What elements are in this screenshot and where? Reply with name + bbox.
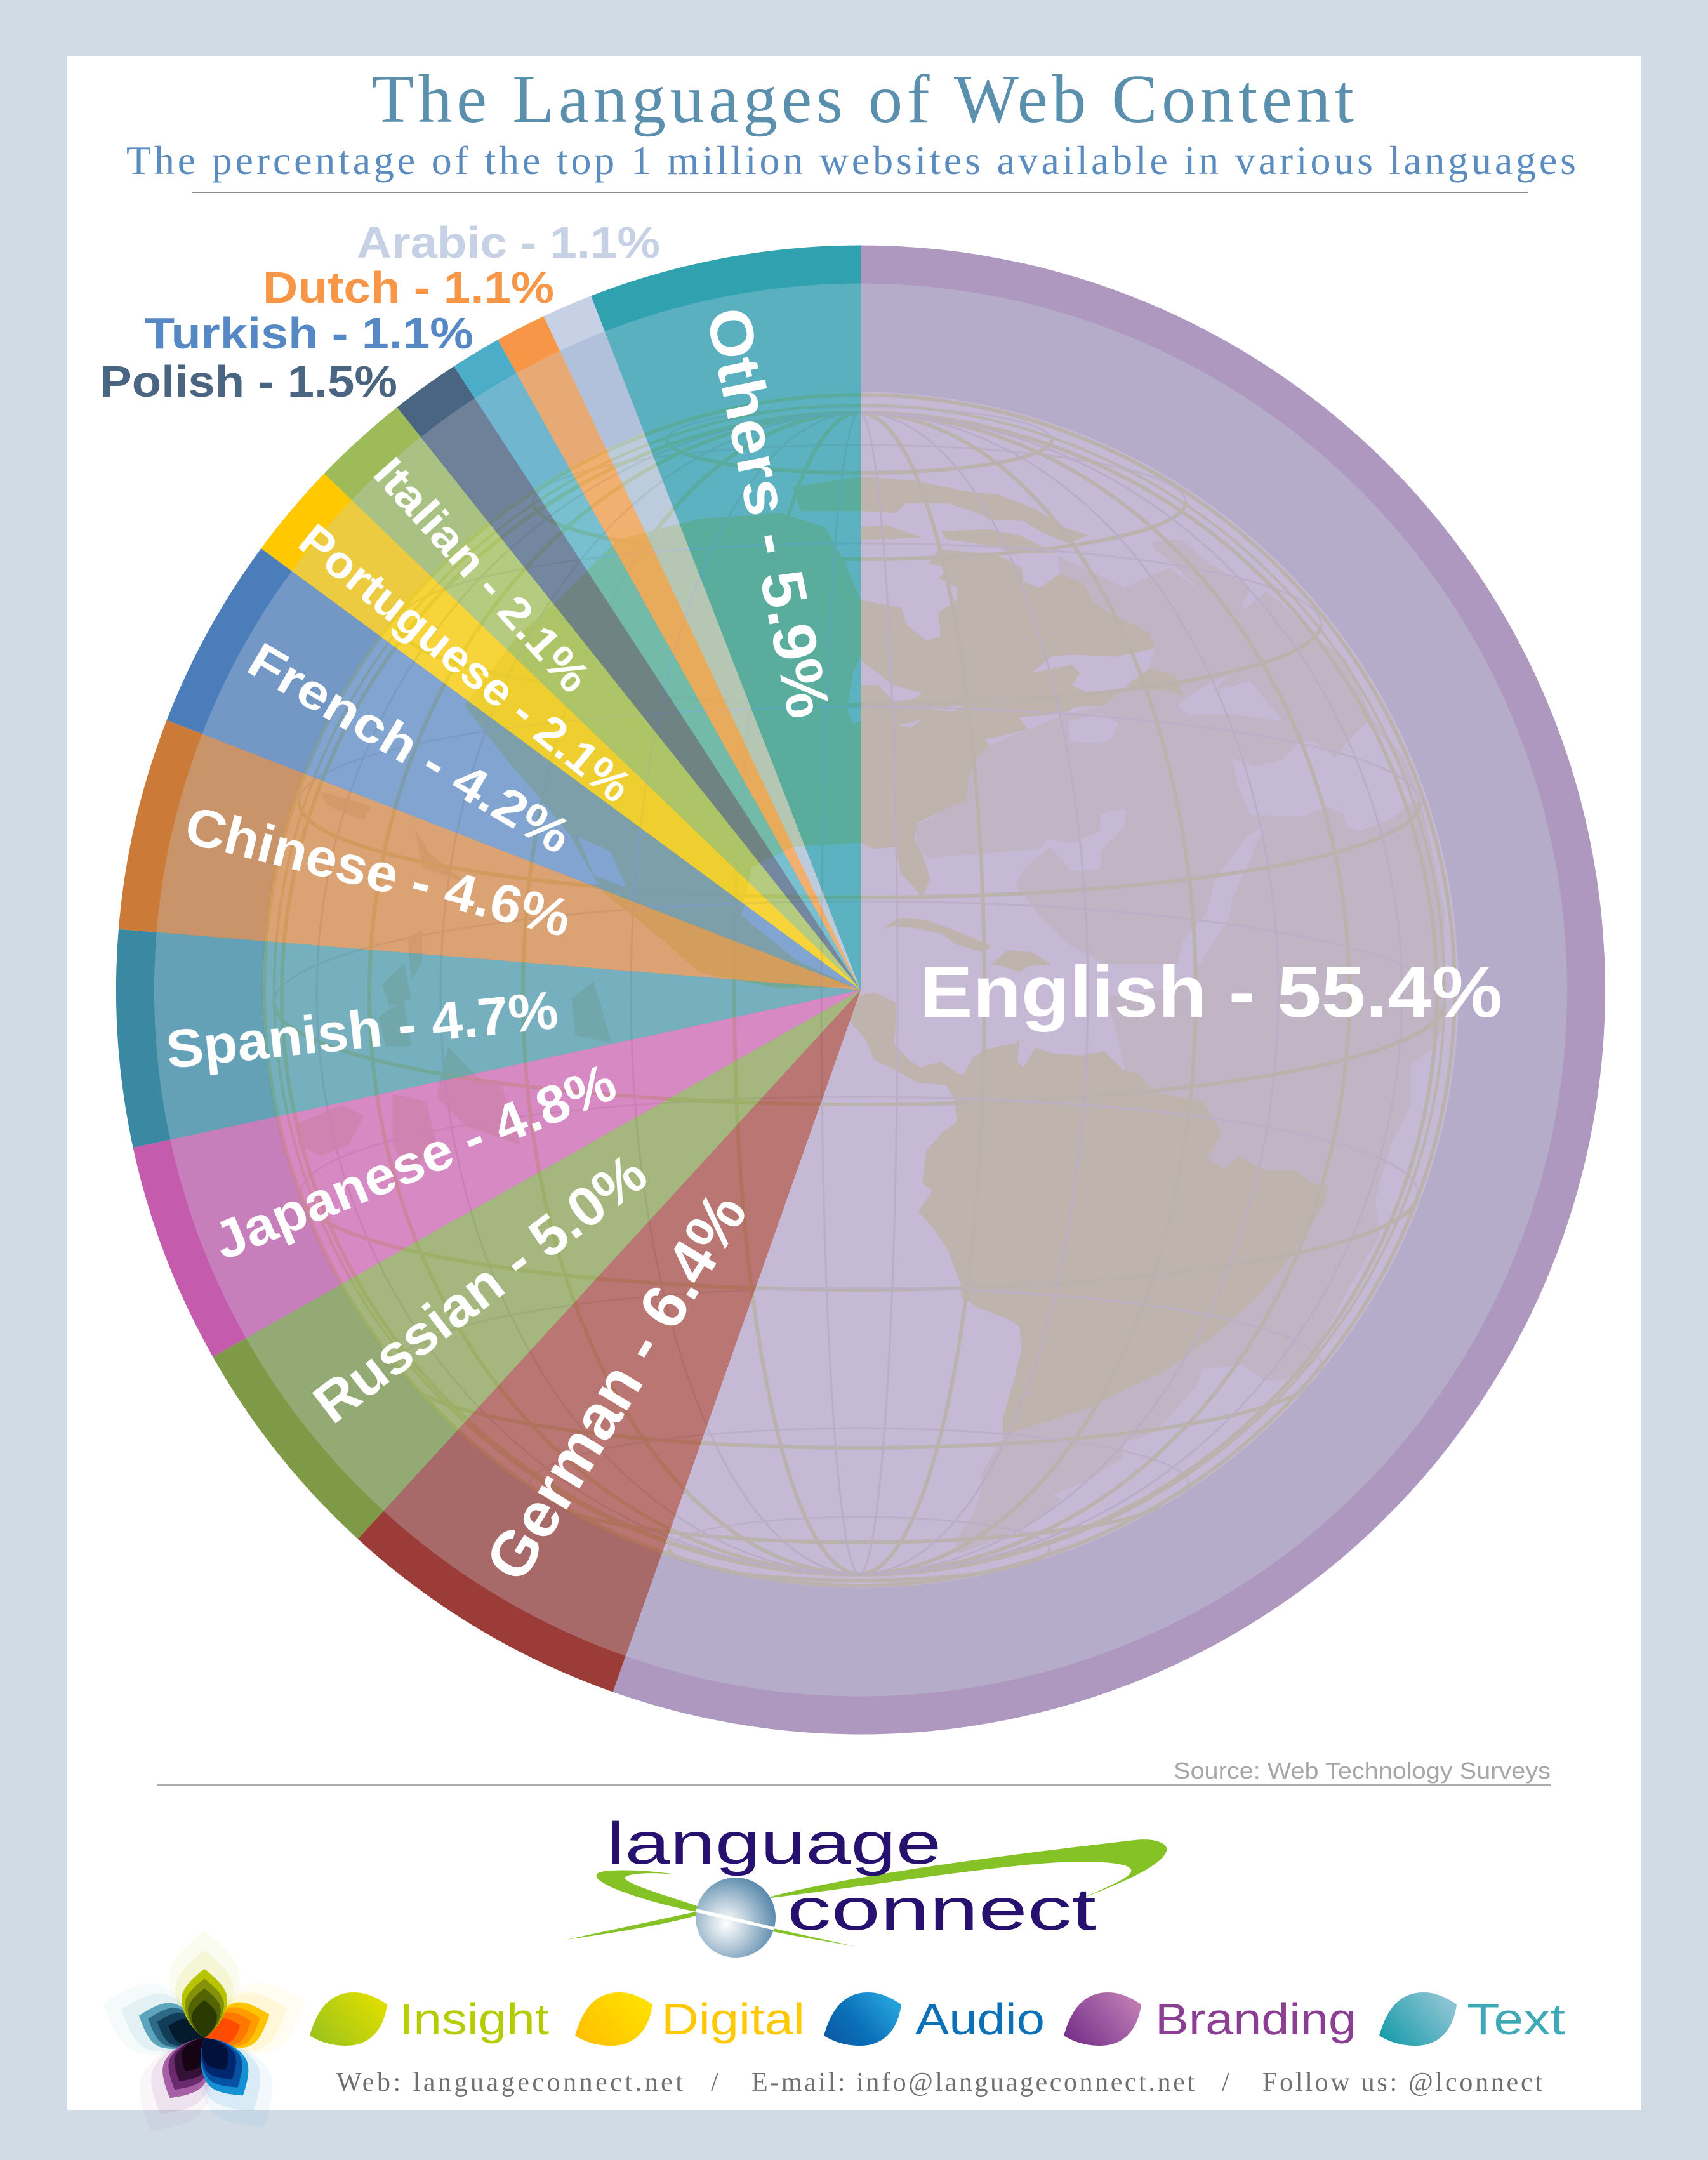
subtitle: The percentage of the top 1 million websites available in various languages: [126, 138, 1576, 183]
slice: Chinese 4.6%: [119, 720, 861, 990]
legend: Insight: [310, 1992, 549, 2046]
outside label: Dutch: Dutch - 1.1%: [263, 263, 554, 312]
petal: olive: [182, 1969, 227, 2038]
pie chart: languages of web content: [116, 245, 1605, 1734]
South and Central America land: [849, 993, 1327, 1436]
source note: Source: Web Technology Surveys: [1174, 1758, 1551, 1784]
legend: Text: [1379, 1992, 1565, 2046]
label: Chinese: Chinese - 4.6%: [180, 795, 577, 948]
petal: blue: [185, 2025, 262, 2108]
graticule: faint back meridians: [317, 413, 1402, 1574]
slice: Polish 1.5%: [397, 366, 861, 990]
contact line: Follow us: @lconnect: [1262, 2068, 1542, 2097]
slice: Others 5.9%: [591, 245, 861, 990]
legend: Text: Text: [1467, 1994, 1565, 2044]
outside label: Polish: Polish - 1.5%: [100, 357, 397, 406]
slice: German 6.4%: [358, 990, 861, 1692]
slice: Portuguese 2.1%: [261, 474, 861, 990]
slice: French 4.2%: [167, 548, 861, 990]
label: German: German - 6.4%: [472, 1181, 760, 1593]
label: Others: Others - 5.9%: [693, 302, 843, 724]
legend: Branding: Branding: [1155, 1994, 1356, 2044]
petal: orange: [197, 1993, 277, 2060]
pale outer petals: [91, 1931, 317, 2149]
faint far-side land: [917, 540, 1445, 1553]
label: Portuguese: Portuguese - 2.1%: [289, 514, 641, 812]
slice: Italian 2.1%: [324, 407, 861, 990]
contact line: E-mail: info@languageconnect.net: [751, 2068, 1195, 2097]
label: Russian: Russian - 5.0%: [301, 1141, 658, 1435]
legend: Branding: [1064, 1992, 1356, 2046]
North America land: [465, 477, 1184, 989]
graticule: back parallels: [274, 407, 1445, 1549]
contact line: [336, 2068, 1542, 2097]
slice: Turkish 1.1%: [454, 340, 861, 990]
legend: Digital: Digital: [661, 1994, 805, 2044]
logo sphere: [696, 1878, 776, 1958]
outside label: Arabic: Arabic - 1.1%: [357, 218, 660, 267]
faint Asia and Australia seen through the globe: [298, 792, 612, 1174]
globe overlay: continents and graticule: [264, 395, 1455, 1586]
petal: teal: [131, 1994, 212, 2060]
slice: Russian 5.0%: [213, 990, 861, 1539]
contact line: /: [1222, 2068, 1229, 2097]
legend: Insight: Insight: [399, 1994, 549, 2044]
legend: Digital: [575, 1992, 805, 2046]
graticule: meridians: [264, 395, 1455, 1586]
legend: Audio: [824, 1992, 1045, 2046]
logo word: language: language: [607, 1810, 941, 1876]
logo: language connect: [566, 1810, 1167, 1958]
slice: Dutch 1.1%: [498, 316, 861, 990]
icon: five-petal flower: [91, 1931, 317, 2149]
slice: Arabic 1.1%: [544, 296, 861, 990]
contact line: /: [711, 2068, 718, 2097]
label: Italian: Italian - 2.1%: [364, 448, 600, 702]
legend: Audio: Audio: [915, 1994, 1045, 2044]
label: French: French - 4.2%: [239, 632, 581, 865]
petal: purple: [150, 2027, 224, 2109]
label: Japanese: Japanese - 4.8%: [205, 1052, 624, 1271]
label: English: English - 55.4%: [920, 952, 1502, 1033]
graticule: front parallels: [274, 440, 1445, 1580]
slice: English 55.4%: [613, 245, 1605, 1734]
label: Spanish: Spanish - 4.7%: [163, 980, 561, 1080]
logo word: connect: connect: [787, 1876, 1096, 1942]
slice: Japanese 4.8%: [133, 990, 861, 1357]
title: The Languages of Web Content: [372, 62, 1354, 137]
logo swoosh: [566, 1839, 1167, 1947]
contact line: Web: languageconnect.net: [336, 2068, 683, 2097]
slice: Spanish 4.7%: [116, 929, 861, 1148]
outside label: Turkish: Turkish - 1.1%: [145, 308, 473, 358]
